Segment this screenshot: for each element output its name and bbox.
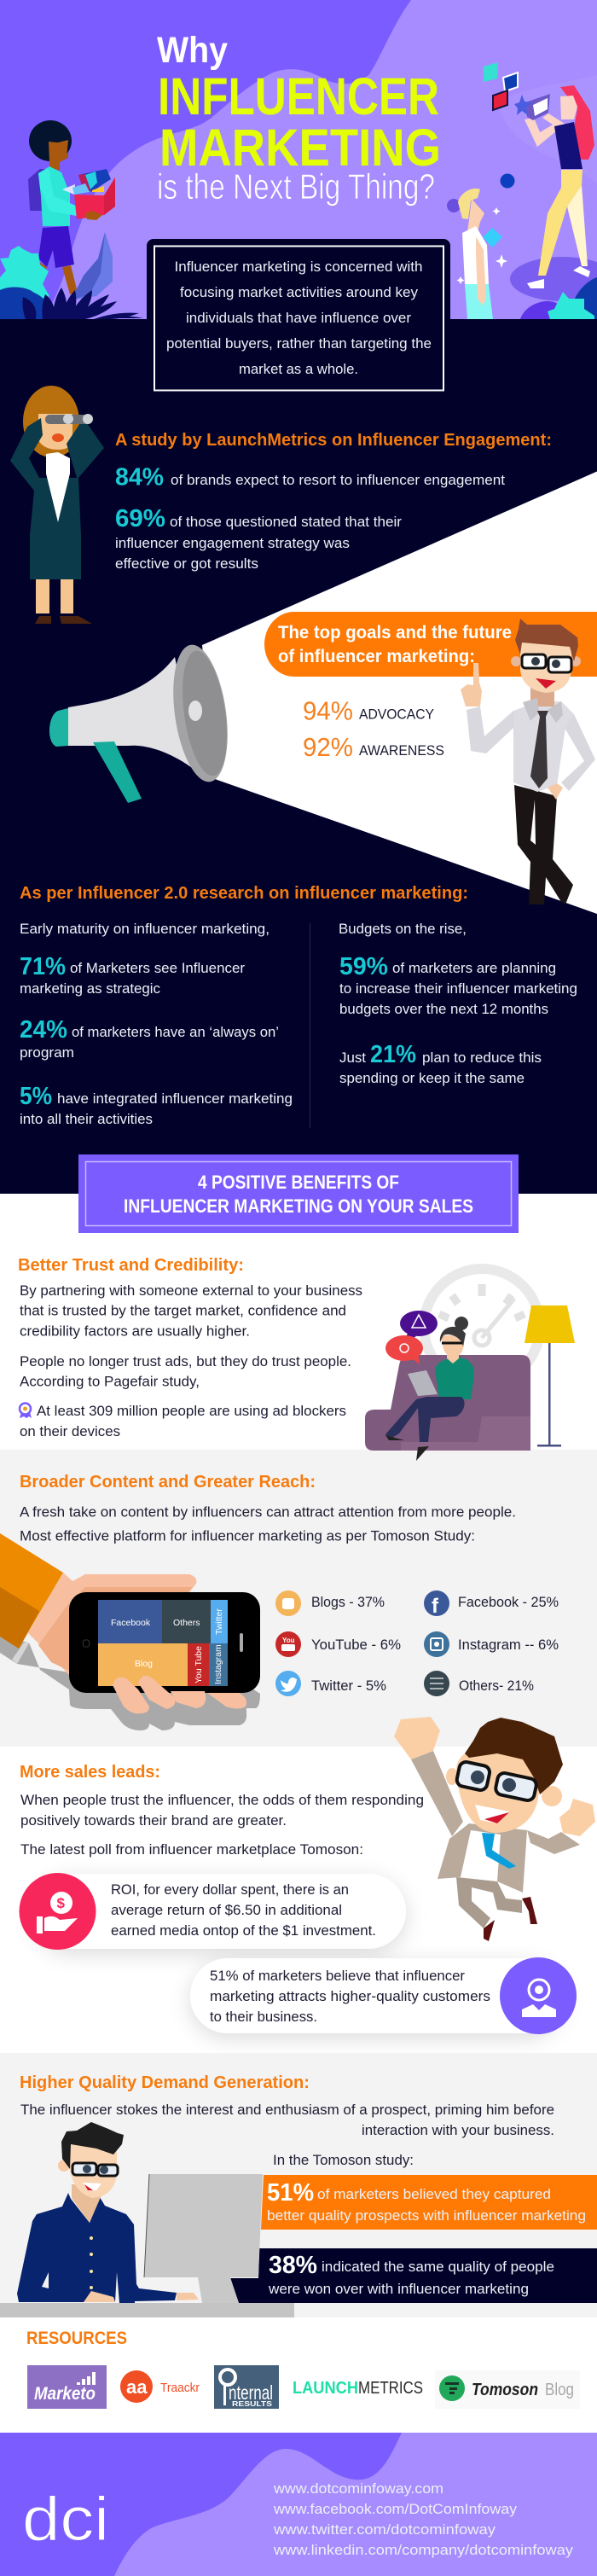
callout: 38%: 38%	[269, 2252, 317, 2279]
panel: intro box: potential buyers, rather than targeting the	[166, 336, 432, 352]
stat: 71%: 71%	[20, 953, 66, 980]
callout: 51%: of marketers believed they captured	[317, 2187, 551, 2202]
logo: Launchmetrics	[293, 2379, 423, 2398]
legend item: instagram: Instagram -- 6%	[458, 1637, 559, 1653]
panel: hero	[0, 0, 597, 320]
logo row	[27, 2365, 580, 2409]
footer links: www.dotcominfoway.com	[273, 2481, 443, 2497]
stat: 84%	[115, 464, 505, 491]
column: early maturity	[20, 922, 293, 1127]
stat: advocacy: 94%	[303, 696, 353, 725]
text block: broader content: Most effective platform for influencer marketing as per Tomoson Study:	[20, 1529, 475, 1544]
logo: Traackr: aa	[126, 2376, 148, 2398]
panel: dark section	[0, 319, 597, 1194]
callout: higher-quality customers: 51% of marketers believe that influencer	[210, 1968, 466, 1984]
treemap on phone: Twitter	[214, 1608, 224, 1635]
text block: ad blockers: At least 309 million people are using ad blockers	[37, 1404, 346, 1419]
callout: higher-quality customers: to their business.	[210, 2009, 317, 2025]
callout: ROI	[19, 1873, 406, 1950]
panel: top goals pill: The top goals and the future	[278, 623, 512, 643]
logo: Internal Results: RESULTS	[232, 2400, 273, 2408]
illustration: woman with tablet	[484, 62, 597, 301]
stat: advocacy	[303, 696, 434, 725]
legend item: youtube	[275, 1631, 401, 1657]
illustration: boy	[447, 174, 515, 319]
panel: higher quality demand	[0, 2053, 597, 2317]
text block: more sales leads: When people trust the influencer, the odds of them responding	[20, 1793, 424, 1808]
stat: 5%	[20, 1083, 293, 1127]
stat: 24%	[20, 1016, 279, 1061]
box contents	[62, 169, 111, 195]
heading: broader content: Broader Content and Greater Reach:	[20, 1473, 316, 1492]
text block: that is trusted by the target market, confidence and	[20, 1304, 346, 1319]
logo: Traackr: Traackr	[160, 2381, 200, 2395]
callout: higher-quality customers: marketing attracts higher-quality customers	[210, 1989, 490, 2004]
panel: broader content background	[0, 1450, 597, 1747]
text block: ad blockers	[20, 1404, 346, 1439]
legend item: others	[424, 1671, 534, 1696]
legend item: twitter	[275, 1671, 386, 1696]
logo: Launchmetrics: METRICS	[358, 2379, 423, 2398]
legend item: twitter: Twitter - 5%	[311, 1678, 386, 1694]
legend: platforms	[275, 1590, 559, 1696]
legend item: others: Others- 21%	[459, 1678, 534, 1694]
stat: 24%: 24%	[20, 1016, 67, 1044]
icon: dollar in hand	[37, 1892, 78, 1933]
panel: top goals pill	[264, 612, 597, 677]
treemap on phone: Blog	[135, 1659, 153, 1669]
text block: ad blockers: on their devices	[20, 1424, 120, 1439]
text block: higher quality	[20, 2102, 554, 2168]
stat: 69%: effective or got results	[115, 556, 258, 572]
callout: 51%: better quality prospects with influencer marketing	[267, 2208, 586, 2224]
column: early maturity: Early maturity on influencer marketing,	[20, 922, 270, 937]
stat: awareness: 92%	[303, 732, 353, 762]
logo: Tomoson Blog: Blog	[545, 2381, 574, 2399]
panel: intro box: Influencer marketing is concerned with	[174, 259, 423, 275]
text block: By partnering with someone external to your business	[20, 1283, 362, 1299]
illustration: hand holding phone	[0, 1533, 260, 1730]
icon: target head	[522, 1980, 556, 2017]
title: is the Next Big Thing?	[157, 166, 435, 206]
illustration: monitor and desk	[0, 2174, 294, 2317]
footer links: www.twitter.com/dotcominfoway	[273, 2522, 496, 2538]
panel: intro box	[147, 239, 450, 391]
text block: According to Pagefair study,	[20, 1374, 200, 1389]
callout: 38%: were won over with influencer marketing	[268, 2282, 529, 2297]
column: budgets: Budgets on the rise,	[339, 922, 467, 937]
text block: more sales leads	[20, 1793, 424, 1858]
icon: badge	[20, 1403, 32, 1418]
heading: Better Trust and Credibility:	[18, 1256, 244, 1275]
stat: 71%: marketing as strategic	[20, 981, 160, 997]
title: Why	[157, 30, 228, 71]
title: MARKETING	[159, 119, 441, 177]
stat: 21%: Just	[339, 1050, 366, 1066]
panel: more sales leads	[0, 1747, 597, 2053]
stat: 5%: 5%	[20, 1083, 52, 1110]
callout: ROI: earned media ontop of the $1 investment.	[111, 1923, 376, 1939]
stat: 69%: 69%	[115, 505, 165, 532]
callout: 51%	[261, 2175, 597, 2230]
logo: Marketo: Marketo	[34, 2384, 96, 2404]
stat: 59%	[339, 953, 577, 1017]
banner: 4 positive benefits: INFLUENCER MARKETING ON YOUR SALES	[124, 1195, 473, 1217]
illustration: person with box	[28, 120, 115, 294]
stat: 59%: 59%	[339, 953, 388, 980]
stat: 59%: to increase their influencer marketing	[339, 981, 577, 997]
panel: intro box: individuals that have influence over	[186, 311, 412, 326]
stat: advocacy: ADVOCACY	[359, 707, 434, 722]
text block: more sales leads: positively towards their brand are greater.	[20, 1813, 287, 1829]
callout: higher-quality customers	[190, 1957, 577, 2034]
banner: 4 positive benefits: 4 POSITIVE BENEFITS OF	[198, 1172, 399, 1193]
logo: Launchmetrics: LAUNCH	[293, 2379, 358, 2398]
text block	[20, 1283, 362, 1389]
stat: 21%: 21%	[370, 1041, 416, 1068]
stat: 59%: budgets over the next 12 months	[339, 1002, 548, 1017]
heading: more sales leads: More sales leads:	[20, 1763, 160, 1782]
logo: Internal Results: nternal	[229, 2381, 273, 2404]
logo: Internal Results	[214, 2365, 279, 2409]
illustration: jumping man	[394, 1717, 595, 1941]
heading: Influencer 2.0: As per Influencer 2.0 research on influencer marketing:	[20, 884, 468, 903]
legend item: facebook: Facebook - 25%	[458, 1595, 559, 1610]
legend item: youtube: You	[282, 1637, 295, 1644]
stat: 21%: plan to reduce this	[422, 1050, 542, 1066]
logo: Tomoson Blog: Tomoson	[472, 2381, 538, 2399]
icon: megaphone	[49, 642, 235, 803]
logo: Marketo	[27, 2365, 107, 2409]
panel: intro box: focusing market activities around key	[180, 285, 419, 300]
panel: intro box: market as a whole.	[239, 362, 358, 377]
icon: dollar in hand: $	[56, 1895, 65, 1911]
megaphone beam	[202, 471, 597, 914]
treemap on phone: Others	[173, 1618, 200, 1628]
stat: 21%	[339, 1041, 542, 1086]
treemap on phone: Facebook	[111, 1618, 151, 1628]
stat: 69%	[115, 505, 403, 572]
heading: higher quality: Higher Quality Demand Generation:	[20, 2073, 310, 2092]
stat: 24%: program	[20, 1045, 74, 1061]
legend item: instagram	[424, 1631, 559, 1657]
stat: 5%: into all their activities	[20, 1112, 153, 1127]
illustration: woman with binoculars	[10, 386, 104, 624]
logo: dci: dci	[22, 2486, 109, 2554]
treemap on phone: Instagram	[213, 1644, 223, 1684]
banner: 4 positive benefits	[78, 1154, 519, 1233]
legend item: blogs	[275, 1590, 385, 1616]
text block: broader content	[20, 1505, 516, 1544]
treemap on phone	[98, 1600, 228, 1686]
legend item: blogs: Blogs - 37%	[311, 1595, 385, 1610]
stat: 69%: of those questioned stated that their	[170, 515, 403, 530]
stat: 5%: have integrated influencer marketing	[57, 1091, 293, 1107]
callout: ROI: ROI, for every dollar spent, there is an	[111, 1882, 349, 1898]
callout: 51%: 51%	[267, 2179, 314, 2207]
illustration: right plants	[520, 277, 597, 319]
stat: 21%: spending or keep it the same	[339, 1071, 525, 1086]
text block: broader content: A fresh take on content by influencers can attract attention from more people.	[20, 1505, 516, 1521]
text block: People no longer trust ads, but they do trust people.	[20, 1354, 351, 1369]
panel: footer	[0, 2433, 597, 2576]
heading: LaunchMetrics study: A study by LaunchMetrics on Influencer Engagement:	[115, 431, 552, 450]
title	[157, 30, 441, 206]
panel: top goals pill: of influencer marketing:	[278, 647, 475, 666]
stat: 71%: of Marketers see Influencer	[70, 961, 246, 976]
treemap on phone: You Tube	[194, 1646, 204, 1683]
stat: awareness	[303, 732, 444, 762]
illustration: man at desk	[17, 2122, 199, 2303]
stat: 84%: 84%	[115, 464, 164, 491]
stat: 69%: influencer engagement strategy was	[115, 536, 350, 551]
legend item: youtube: YouTube - 6%	[311, 1637, 401, 1653]
stat: 59%: of marketers are planning	[392, 961, 556, 976]
stat: 84%: of brands expect to resort to influencer engagement	[171, 473, 505, 488]
column: budgets	[339, 922, 577, 1086]
legend item: facebook	[424, 1590, 559, 1618]
text block: credibility factors are usually higher.	[20, 1324, 250, 1340]
callout: 38%: indicated the same quality of people	[322, 2259, 554, 2275]
footer links	[273, 2481, 574, 2558]
illustration: left plants	[0, 232, 143, 320]
text block: higher quality: The influencer stokes the interest and enthusiasm of a prospect, priming him before	[20, 2102, 554, 2118]
footer links: www.linkedin.com/company/dotcominfoway	[273, 2543, 574, 2558]
text block: higher quality: In the Tomoson study:	[273, 2153, 414, 2168]
panel: better trust	[18, 1256, 362, 1439]
illustration: man pointing	[461, 619, 595, 904]
text block: more sales leads: The latest poll from influencer marketplace Tomoson:	[20, 1842, 363, 1858]
title: INFLUENCER	[158, 67, 439, 125]
callout: 38%	[230, 2248, 597, 2303]
heading: resources: RESOURCES	[26, 2329, 127, 2348]
callout: ROI: average return of $6.50 in additional	[111, 1903, 342, 1918]
illustration: woman on sofa	[365, 1269, 575, 1461]
stat: 71%	[20, 953, 246, 997]
logo: Traackr	[120, 2370, 200, 2403]
stat: awareness: AWARENESS	[359, 742, 444, 759]
legend item: facebook: f	[432, 1595, 439, 1618]
stat: 24%: of marketers have an ‘always on’	[72, 1025, 279, 1040]
footer links: www.facebook.com/DotComInfoway	[273, 2502, 518, 2517]
text block: higher quality: interaction with your business.	[362, 2123, 554, 2138]
logo: Tomoson Blog	[435, 2370, 580, 2409]
